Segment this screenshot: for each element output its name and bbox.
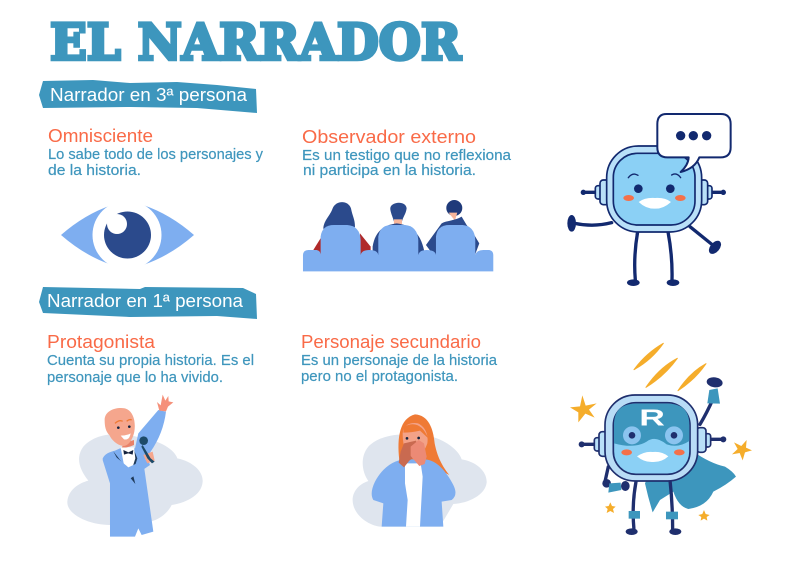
- icon: eye: [61, 200, 194, 270]
- section banner: tercera persona: Narrador en 3ª persona: [50, 85, 248, 105]
- text block: protagonista: personaje que lo ha vivido.: [47, 370, 223, 386]
- robot hands and feet: [579, 376, 726, 535]
- robot legs and arms: [575, 192, 723, 280]
- cape: [645, 452, 736, 512]
- robot ears: [594, 428, 711, 456]
- robot face: [621, 426, 685, 462]
- text block: omnisciente: de la historia.: [48, 163, 141, 179]
- section banner: tercera persona: [39, 80, 257, 113]
- text block: protagonista: [47, 332, 254, 386]
- section banner: primera persona: Narrador en 1ª persona: [47, 291, 244, 311]
- illustration: bald man with microphone: [67, 395, 203, 537]
- superhero robot: [570, 343, 752, 535]
- robot hands and feet: [567, 190, 726, 286]
- text block: protagonista: Cuenta su propia historia. Es el: [47, 353, 254, 369]
- robot ears: [595, 180, 712, 205]
- stars: [570, 395, 752, 521]
- robot head: [607, 146, 702, 232]
- robot legs and arms: [582, 398, 723, 530]
- robot head: [605, 395, 698, 481]
- text block: observador externo: ni participa en la historia.: [303, 163, 476, 179]
- robot face: [623, 174, 686, 209]
- illustration: woman covering her mouth: [353, 414, 487, 527]
- text block: personaje secundario: Personaje secundario: [301, 332, 481, 352]
- speech bubble: [657, 114, 731, 172]
- text block: protagonista: Protagonista: [47, 332, 156, 352]
- robot with speech bubble: [567, 114, 731, 286]
- title: EL NARRADOR: [50, 12, 461, 72]
- text block: observador externo: Es un testigo que no reflexiona: [302, 148, 512, 164]
- section banner: primera persona: [39, 287, 257, 319]
- text block: omnisciente: Lo sabe todo de los personajes y: [48, 147, 264, 163]
- text block: personaje secundario: [301, 332, 498, 385]
- text block: observador externo: Observador externo: [302, 127, 476, 147]
- text block: personaje secundario: Es un personaje de la historia: [301, 353, 498, 369]
- text block: observador externo: [302, 127, 512, 179]
- text block: personaje secundario: pero no el protagonista.: [301, 369, 458, 385]
- light streaks: [634, 343, 706, 391]
- text block: omnisciente: Omnisciente: [48, 126, 153, 146]
- hero mask: [614, 404, 689, 446]
- robot cuffs and boots: [608, 388, 720, 519]
- illustration: audience from behind: [303, 200, 493, 271]
- logo letter: R: [639, 405, 665, 431]
- text block: omnisciente: [48, 126, 264, 179]
